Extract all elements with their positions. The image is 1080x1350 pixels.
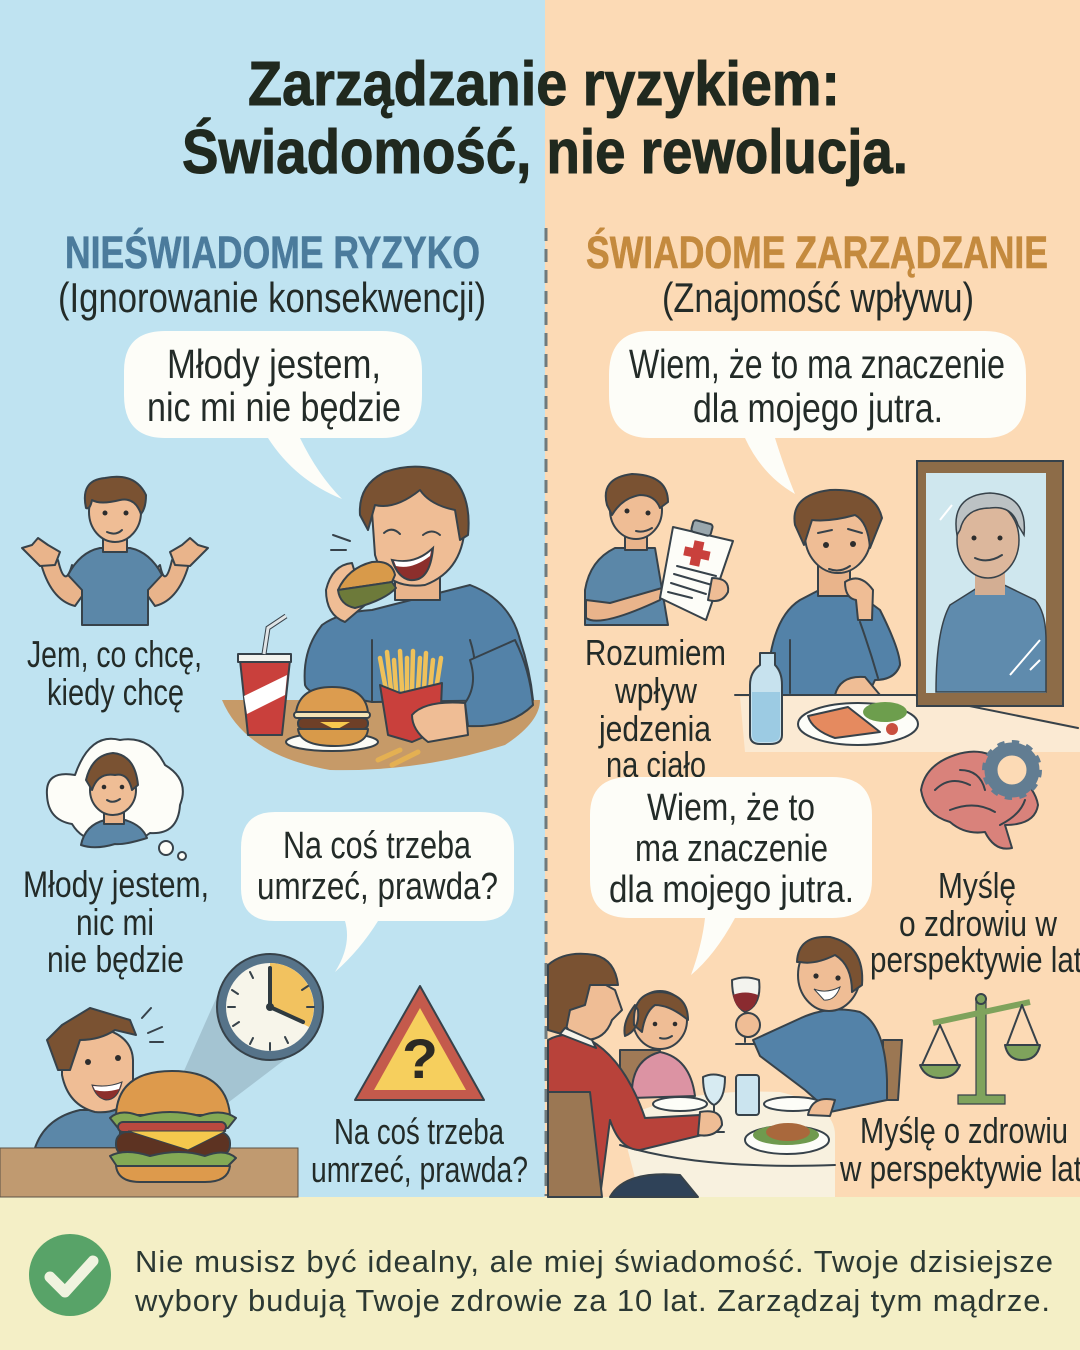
heading: conscious management: [586, 227, 1048, 321]
heading: unconscious risk: NIEŚWIADOME RYZYKO: [65, 227, 480, 278]
heading: unconscious risk: [58, 227, 486, 321]
boy with wine: [883, 1040, 902, 1100]
table: [620, 1092, 835, 1197]
label: understand food: [585, 632, 726, 785]
label: understand food: Rozumiem: [585, 632, 726, 673]
label: young thought: nic mi: [76, 902, 154, 943]
label: understand food: wpływ: [614, 670, 698, 711]
speech bubble: young: nic mi nie będzie: [147, 384, 401, 430]
label: must die of something: umrzeć, prawda?: [311, 1149, 528, 1190]
heading: conscious management: (Znajomość wpływu): [662, 274, 974, 321]
label: understand food: na ciało: [606, 744, 706, 785]
illustration: thoughtful boy at table: [735, 490, 1080, 752]
father: [548, 1035, 702, 1197]
speech bubble: tomorrow: dla mojego jutra.: [693, 385, 943, 431]
speech bubble: must die of something: umrzeć, prawda?: [257, 866, 498, 908]
illustration: warning triangle: ?: [402, 1027, 438, 1090]
illustration: brain with gear: [921, 743, 1039, 849]
title: Świadomość, nie rewolucja.: [182, 118, 908, 187]
sweater: [305, 585, 533, 702]
label: must die of something: Na coś trzeba: [334, 1111, 505, 1152]
icon: green check: [29, 1234, 111, 1316]
illustration: balance scale: [920, 994, 1040, 1104]
label: eat what I want: [27, 634, 202, 713]
head: [372, 472, 465, 586]
label: think long term: Myślę: [938, 865, 1016, 906]
fries: [380, 651, 441, 690]
illustration: warning triangle: [355, 986, 484, 1100]
burger in hand: [326, 563, 365, 622]
illustration: thought bubble with boy: [47, 739, 186, 860]
label: eat what I want: Jem, co chcę,: [27, 634, 202, 675]
speech bubble: young: Młody jestem,: [167, 341, 381, 387]
girl: [620, 1050, 660, 1090]
illustration: shrugging boy: [22, 477, 208, 625]
illustration: boy with medical clipboard: [585, 474, 733, 625]
cup: [240, 660, 290, 735]
heading: unconscious risk: (Ignorowanie konsekwencji): [58, 274, 486, 321]
right sleeve and hand: [465, 640, 533, 726]
speech bubble: must die of something: [241, 812, 514, 972]
footer callout: [29, 1234, 1053, 1318]
speech bubble: young: [124, 331, 422, 499]
label: eat what I want: kiedy chcę: [47, 672, 184, 713]
title: [182, 50, 908, 187]
speech bubble: tomorrow 2: [590, 777, 872, 975]
illustration: boy with giant burger: [0, 1008, 298, 1197]
plate with salmon: [798, 703, 918, 745]
bottle: [750, 653, 782, 744]
illustration: mirror with old man: [917, 461, 1063, 706]
label: understand food: jedzenia: [598, 708, 712, 749]
label: young thought: [23, 864, 209, 980]
plate and burger: [286, 733, 378, 751]
footer text: [134, 1244, 1053, 1318]
label: think long term 2: [839, 1110, 1080, 1189]
label: must die of something: [311, 1111, 528, 1190]
speech bubble: tomorrow 2: Wiem, że to: [647, 787, 815, 829]
label: think long term: [870, 865, 1080, 980]
title: Zarządzanie ryzykiem:: [248, 50, 840, 119]
speech bubble: tomorrow 2: ma znaczenie: [635, 828, 828, 870]
illustration: family at dinner: [548, 937, 902, 1197]
panel: unconscious risk: [0, 227, 540, 1197]
footer text: Nie musisz być idealny, ale miej świadomość. Twoje dzisiejsze: [135, 1244, 1053, 1279]
illustration: boy eating fast food: [222, 467, 540, 770]
illustration: clock with beam: [180, 954, 323, 1105]
speech bubble: tomorrow 2: dla mojego jutra.: [609, 869, 854, 911]
footer text: wybory budują Twoje zdrowie za 10 lat. Zarządzaj tym mądrze.: [134, 1283, 1050, 1318]
label: young thought: Młody jestem,: [23, 864, 209, 905]
speech bubble: tomorrow: [609, 331, 1026, 494]
speech bubble: must die of something: Na coś trzeba: [283, 825, 472, 867]
label: young thought: nie będzie: [47, 939, 184, 980]
table: [222, 700, 540, 770]
panel: conscious management: [548, 227, 1080, 1197]
